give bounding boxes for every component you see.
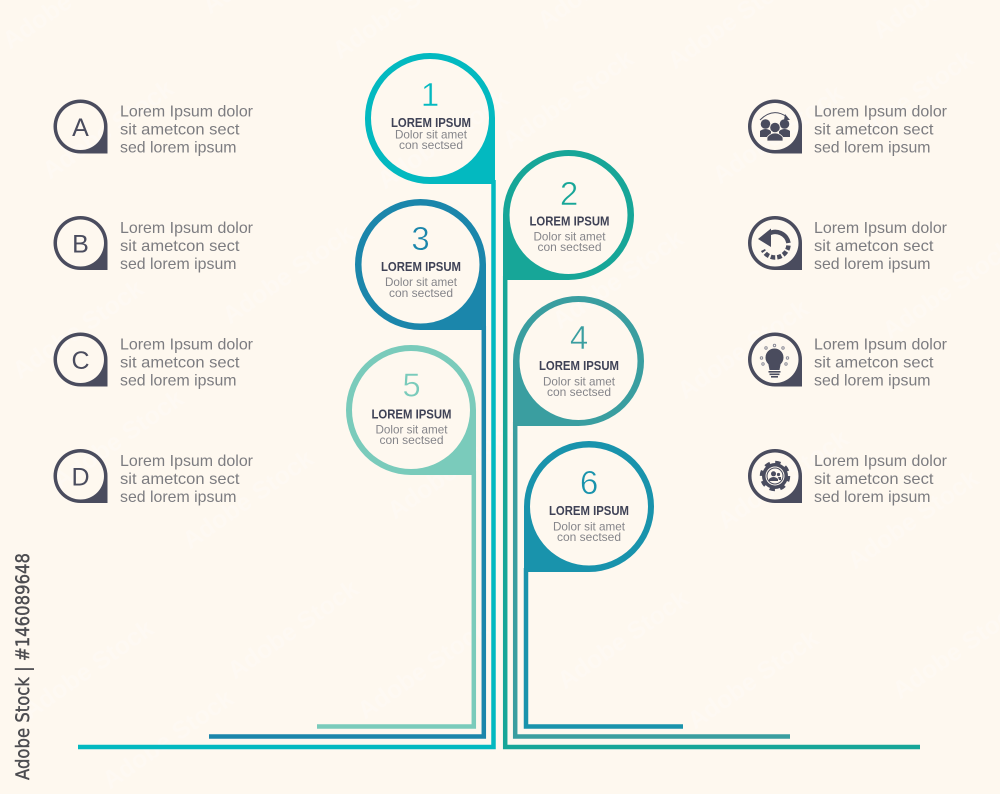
icon: letter A pin: A: [72, 114, 89, 142]
text: Adobe Stock: [707, 79, 849, 190]
legend text idea: sit ametcon sect: [814, 354, 934, 372]
bubble 5 text: Dolor sit amet: [376, 422, 448, 436]
text: Adobe Stock: [217, 219, 359, 330]
bubble 1 text: con sectsed: [399, 138, 463, 152]
bubble 6 text: con sectsed: [557, 530, 621, 544]
text: Adobe Stock: [222, 574, 364, 685]
legend text people: sed lorem ipsum: [814, 139, 930, 156]
legend text idea: Lorem Ipsum dolor: [814, 337, 948, 354]
icon: letter D pin: D: [71, 464, 90, 492]
tree branch 4 with bubble: [513, 296, 790, 736]
legend text D: [120, 453, 254, 506]
icon: letter B pin: [54, 216, 108, 270]
tree branch 2 with bubble: [503, 150, 920, 747]
legend item A: [54, 100, 254, 156]
legend item people: [748, 100, 948, 156]
legend text B: [120, 220, 254, 273]
legend text C: sed lorem ipsum: [120, 372, 236, 389]
icon: letter C pin: C: [71, 347, 90, 375]
text: Adobe Stock: [712, 424, 854, 535]
legend item D: [54, 449, 254, 506]
bubble 5 text: [376, 422, 448, 447]
legend text people: [814, 104, 948, 156]
legend text undo: [814, 220, 948, 273]
legend text undo: Lorem Ipsum dolor: [814, 220, 948, 237]
text: Adobe Stock: [37, 74, 179, 185]
tree branch 5 with bubble: [317, 345, 476, 726]
legend text people: Lorem Ipsum dolor: [814, 104, 948, 121]
bubble 5 heading: LOREM IPSUM: [372, 406, 452, 421]
bubble 5 text: con sectsed: [380, 433, 444, 447]
number 2: 2: [560, 175, 578, 212]
bubble 4 text: [543, 374, 616, 399]
legend text undo: sit ametcon sect: [814, 238, 934, 255]
legend text settings: sed lorem ipsum: [814, 489, 930, 506]
legend text settings: Lorem Ipsum dolor: [814, 453, 948, 470]
icon: letter B pin: B: [72, 230, 89, 258]
text: Adobe Stock: [177, 444, 319, 555]
bubble 2 text: [534, 230, 606, 254]
legend text B: sit ametcon sect: [120, 238, 240, 255]
icon: light bulb: [748, 332, 802, 386]
text: Adobe Stock: [382, 414, 524, 525]
bubble 1 text: [395, 128, 468, 152]
number 1: 1: [421, 76, 439, 113]
icon: team with arc arrow: [748, 100, 802, 154]
legend text idea: sed lorem ipsum: [814, 372, 930, 389]
text: Adobe Stock: [497, 44, 639, 155]
legend text D: sed lorem ipsum: [120, 489, 236, 506]
bubble 3 text: con sectsed: [389, 286, 453, 300]
legend text A: sit ametcon sect: [120, 122, 240, 138]
bubble 3 heading: LOREM IPSUM: [381, 259, 461, 274]
legend text D: sit ametcon sect: [120, 471, 240, 488]
legend text B: Lorem Ipsum dolor: [120, 220, 254, 237]
text: Adobe Stock: [352, 614, 494, 725]
text: Adobe Stock: [547, 224, 689, 335]
icon: gear with people: [748, 449, 802, 503]
legend text settings: sit ametcon sect: [814, 471, 934, 488]
number 5: 5: [402, 366, 421, 404]
text: Adobe Stock: [672, 294, 814, 405]
legend text A: [120, 104, 254, 156]
legend item undo: [748, 216, 948, 273]
legend item C: [54, 332, 254, 389]
bubble 6 text: Dolor sit amet: [553, 520, 626, 534]
bubble 1 text: Dolor sit amet: [395, 128, 468, 142]
text: Adobe Stock: [682, 624, 824, 735]
text: Adobe Stock: [372, 84, 514, 195]
bubble 6 text: [553, 520, 626, 544]
bubble 4 text: con sectsed: [547, 385, 611, 399]
icon: letter C pin: [54, 332, 108, 386]
bubble 4 text: Dolor sit amet: [543, 374, 616, 388]
tree branch 1 with bubble: [78, 53, 495, 747]
text: Adobe Stock: [842, 464, 984, 575]
stock image credit: Adobe Stock | #146089648: [12, 553, 34, 780]
number 4: 4: [570, 319, 588, 356]
number 3: 3: [411, 220, 430, 257]
legend text C: Lorem Ipsum dolor: [120, 337, 254, 354]
text: Adobe Stock: [47, 384, 189, 495]
stem 5: [317, 471, 474, 726]
bubble 3 text: Dolor sit amet: [385, 275, 458, 289]
legend text D: Lorem Ipsum dolor: [120, 453, 254, 470]
stem 4: [515, 422, 790, 736]
stem 1: [78, 180, 494, 747]
tree branch 6 with bubble: [524, 441, 683, 726]
stem 6: [526, 568, 683, 726]
legend text people: sit ametcon sect: [814, 122, 934, 138]
legend item settings: [748, 449, 948, 506]
legend text settings: [814, 453, 948, 506]
bubble 2 text: Dolor sit amet: [534, 230, 606, 244]
text: Adobe Stock: [552, 584, 694, 695]
legend text B: sed lorem ipsum: [120, 256, 236, 273]
text: Adobe Stock: [17, 614, 159, 725]
legend text C: [120, 337, 254, 389]
text: Adobe Stock: [7, 274, 149, 385]
tree branch 3 with bubble: [209, 199, 486, 736]
bubble 2 heading: LOREM IPSUM: [530, 213, 610, 228]
legend text undo: sed lorem ipsum: [814, 256, 930, 273]
bubble 6 heading: LOREM IPSUM: [549, 503, 629, 518]
text: Adobe Stock: [837, 44, 979, 155]
stem 3: [209, 326, 484, 736]
legend text idea: [814, 337, 948, 389]
legend item B: [54, 216, 254, 273]
icon: letter D pin: [54, 449, 108, 503]
legend item idea: [748, 332, 948, 389]
bubble 4 heading: LOREM IPSUM: [539, 358, 619, 373]
icon: letter A pin: [54, 100, 108, 154]
text: Adobe Stock: [97, 684, 239, 794]
bubble 2 text: con sectsed: [538, 240, 602, 254]
legend text A: sed lorem ipsum: [120, 139, 236, 156]
icon: circular undo arrow: [748, 216, 802, 270]
legend text C: sit ametcon sect: [120, 354, 240, 372]
legend text A: Lorem Ipsum dolor: [120, 104, 254, 121]
bubble 3 text: [385, 275, 458, 300]
stem 2: [505, 276, 920, 747]
bubble 1 heading: LOREM IPSUM: [391, 115, 471, 130]
number 6: 6: [580, 464, 598, 501]
